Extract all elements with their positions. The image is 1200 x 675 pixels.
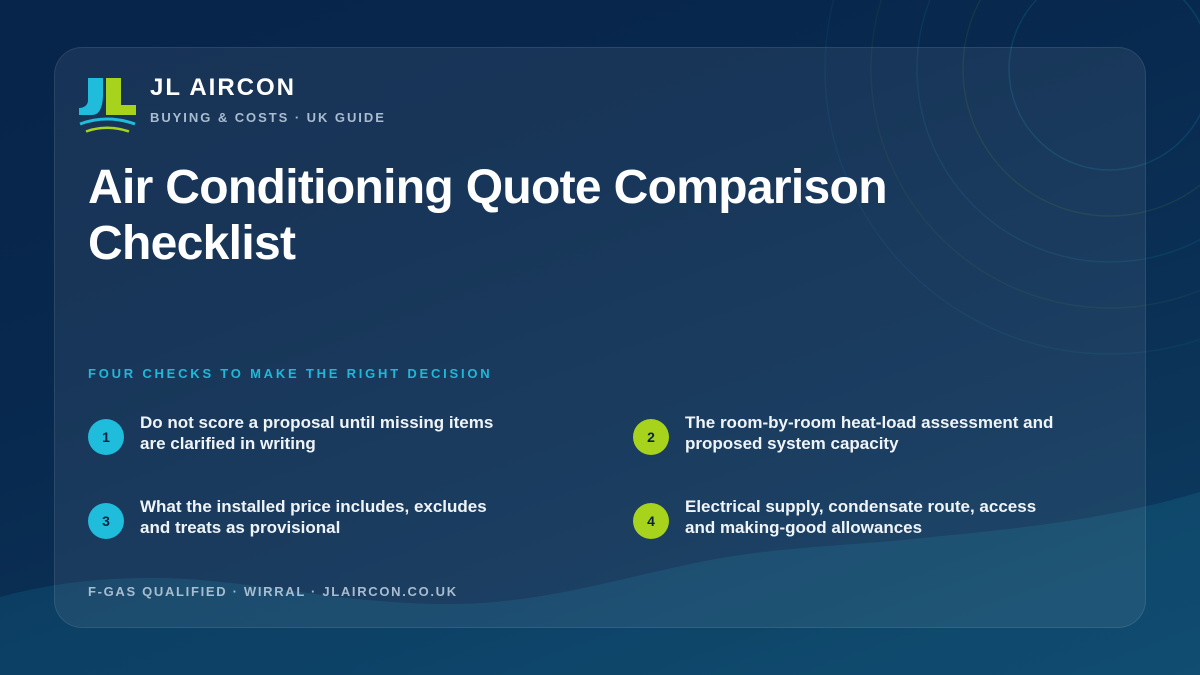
logo: JL mark	[79, 78, 136, 133]
checklist item 3: and treats as provisional	[140, 518, 340, 537]
footer: F-GAS QUALIFIED · WIRRAL · JLAIRCON.CO.UK	[88, 584, 458, 599]
checklist item 1: 1	[102, 429, 110, 445]
title: Checklist	[88, 217, 295, 270]
checklist item 4: 4	[647, 513, 655, 529]
section heading: FOUR CHECKS TO MAKE THE RIGHT DECISION	[88, 366, 492, 381]
panel: main card	[54, 47, 1146, 628]
icon: blue arc	[80, 119, 135, 124]
brand name: JL AIRCON	[150, 74, 296, 101]
title: Air Conditioning Quote Comparison	[88, 161, 887, 214]
checklist item 3: What the installed price includes, excludes	[140, 497, 487, 516]
checklist item 2: proposed system capacity	[685, 434, 899, 453]
checklist item 4: and making-good allowances	[685, 518, 922, 537]
checklist item 2: The room-by-room heat-load assessment and	[685, 413, 1053, 432]
checklist item 1: Do not score a proposal until missing items	[140, 413, 493, 432]
title	[88, 161, 887, 270]
checklist item 1: are clarified in writing	[140, 434, 316, 453]
icon: letter J	[79, 78, 103, 115]
checklist item 3	[88, 497, 487, 539]
brand subtitle: BUYING & COSTS · UK GUIDE	[150, 110, 386, 125]
checklist item 2	[633, 413, 1053, 455]
icon: green arc	[86, 128, 129, 132]
checklist item 2: 2	[647, 429, 655, 445]
icon: letter L	[106, 78, 136, 115]
checklist item 4: Electrical supply, condensate route, access	[685, 497, 1036, 516]
checklist item 4	[633, 497, 1036, 539]
checklist item 1	[88, 413, 493, 455]
checklist item 3: 3	[102, 513, 110, 529]
